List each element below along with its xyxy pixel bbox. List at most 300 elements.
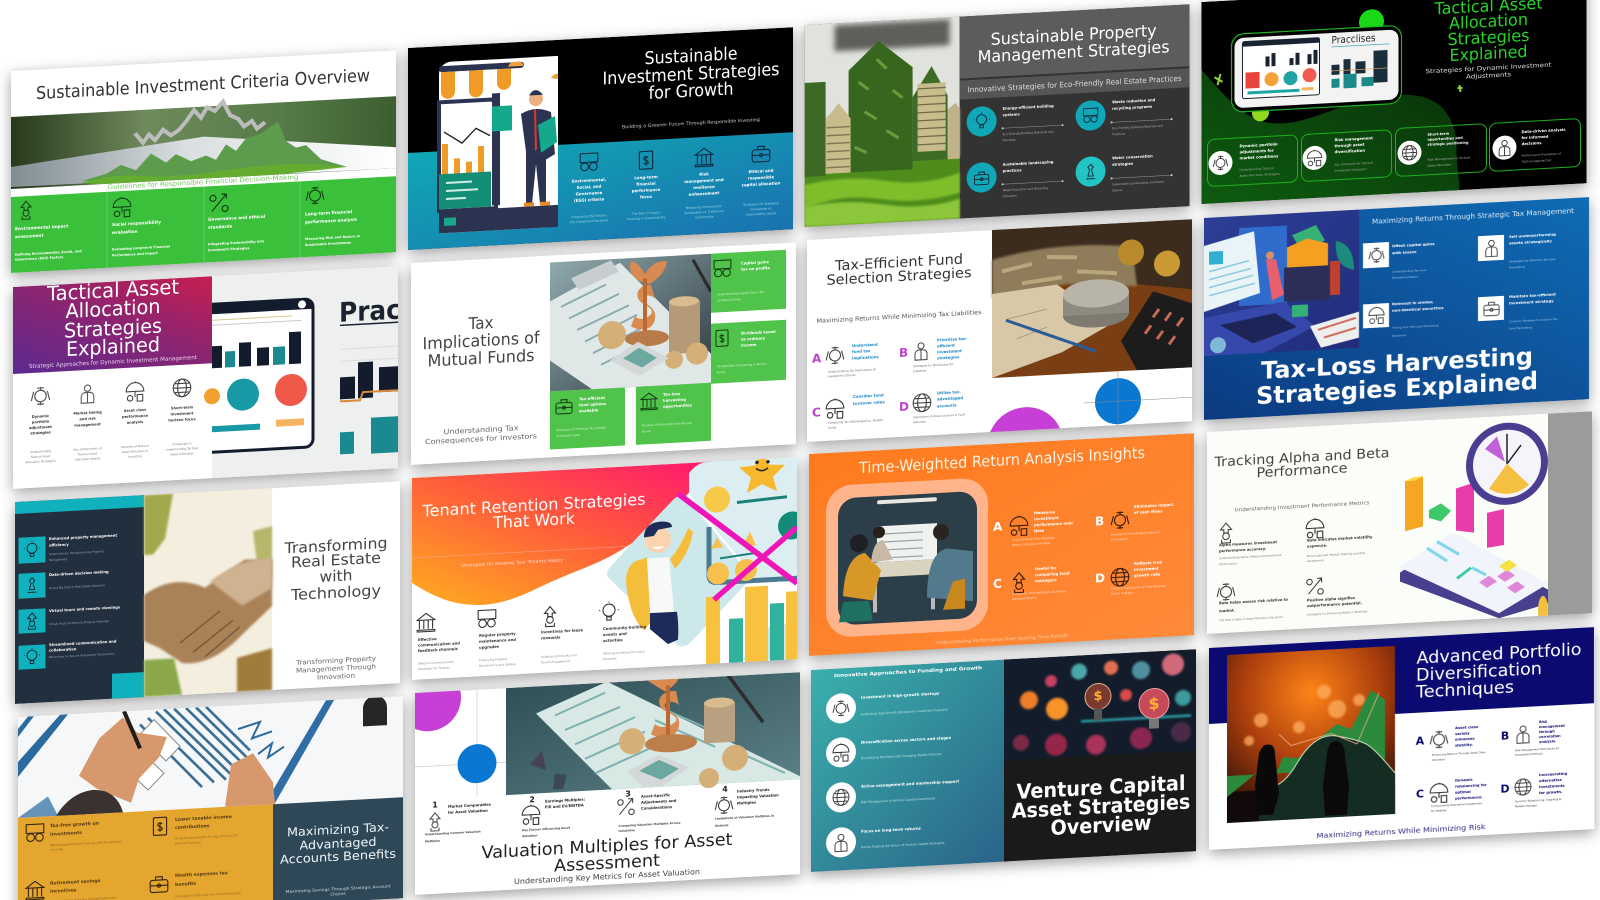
heading: Selection Strategies: [826, 265, 971, 289]
icon: [150, 876, 168, 893]
icon: [556, 399, 572, 414]
accent circles: [1252, 9, 1384, 122]
item: long-term focus: financial: [636, 181, 656, 187]
item: reinvest: [1363, 299, 1444, 339]
item: long-term performance: performance analysis: [305, 217, 358, 226]
item: risk management: management and: [684, 177, 724, 184]
item: health expenses: Health expenses tax: [175, 870, 228, 879]
heading: That Work: [492, 509, 576, 532]
item: long-term performance: Sustainable Investments: [305, 241, 351, 247]
callout: tax-efficient: on Mutual Funds: [556, 433, 580, 438]
heading: [280, 820, 396, 867]
item A: fund tax: [852, 348, 871, 354]
image: tax form with dollar statue: [506, 662, 800, 799]
icon: [1307, 578, 1323, 595]
subtitle strip: [960, 68, 1190, 100]
item: beta exposure: [1306, 515, 1373, 563]
item: alpha: Performance: [1219, 561, 1237, 566]
heading: [979, 25, 1169, 64]
item: communication: [417, 612, 460, 671]
card: dynamic portfolio: Dynamic portfolio: [1240, 141, 1278, 148]
item: lease incentives: Building Community and: [541, 653, 577, 659]
item: governance: Investment Strategies: [208, 246, 250, 252]
heading: Performance: [1256, 460, 1348, 481]
item: active management: Risk Management in Venture Capital Investments: [861, 796, 936, 804]
item: ethical capital: responsible: [748, 174, 774, 181]
item D: Practical Applications of Time-Weighted: [1111, 584, 1167, 591]
icon: [1111, 568, 1129, 586]
item: water conservation: Spaces: [1112, 188, 1123, 192]
icon: [1478, 296, 1504, 321]
item: long-term focus: focus: [640, 194, 653, 199]
icon: [1010, 515, 1028, 536]
callout: dividends: [711, 320, 786, 384]
item B: Risk Management Techniques for: [1515, 746, 1560, 752]
header band: [13, 276, 212, 374]
item B: through: [1539, 729, 1555, 734]
callout: tax-loss: harvesting: [663, 397, 686, 403]
item: risk management: [684, 147, 724, 220]
item: long-term focus: Investing in Sustainability: [627, 215, 666, 221]
item A: Return Calculation Methods: [1012, 541, 1051, 547]
item: sustainable landscaping: Sustainable landscaping: [1003, 160, 1054, 167]
item C: Funds: [828, 425, 837, 430]
item: alpha: Understanding Alpha: Measuring Investment: [1219, 553, 1282, 560]
item: positive alpha: [1307, 576, 1368, 617]
icon: [18, 572, 46, 599]
item: long-term returns: Focus on long-term returns: [861, 826, 922, 834]
item: beta risk: [1217, 580, 1288, 622]
card: risk management: Investment Decisions: [1334, 167, 1367, 173]
item D: Selection: [913, 420, 926, 424]
item: dynamic adjustment: Understanding: [30, 449, 51, 454]
item: lease incentives: Incentives for lease: [541, 627, 584, 635]
panel: Tenant Retention Strategies slide: [412, 449, 806, 680]
item 2: Valuation: [522, 833, 537, 838]
item: virtual tours: [18, 604, 121, 634]
subtitle: Strategies for Keeping Your Tenants Happy: [461, 557, 563, 569]
item: reinvest: Timing Your Tax-Loss Harvesting: [1391, 323, 1439, 330]
callout: tax-efficient: fund options: [579, 401, 607, 407]
item: sell underperforming: [1478, 231, 1556, 271]
dashboard card: [1232, 25, 1402, 112]
panel: Tactical Asset Allocation black slide: [1202, 0, 1586, 204]
heading: Management Strategies: [978, 37, 1170, 67]
item A: A: [812, 351, 822, 366]
item: virtual tours: Virtual Tours: Enhancing Property Viewings: [49, 619, 109, 626]
item: ethical capital: Strategies for Engaging: [743, 201, 779, 207]
item: dynamic adjustment: adjustment: [29, 425, 52, 430]
panel: Tax-Efficient Fund Selection slide: [807, 219, 1192, 495]
item: maintenance: maintenance and: [479, 637, 516, 644]
item: governance: [208, 192, 266, 252]
item 4: Impacting Valuation: [737, 793, 779, 800]
item: short-term: investment: [171, 411, 194, 416]
item: ESG criteria: [570, 152, 609, 224]
item D: Market Changes: [1515, 803, 1537, 808]
card: short-term: strategic positioning: [1428, 141, 1469, 147]
heading: Tenant Retention Strategies: [421, 490, 646, 521]
item 1: Market Comparables: [448, 803, 492, 809]
item D: Incorporating: [1539, 772, 1568, 777]
heading: [1256, 342, 1538, 410]
item D: growth rate: [1134, 572, 1160, 578]
icon: [714, 260, 731, 277]
illustration: person and app tiles: [607, 449, 806, 669]
icon: umbrella: [113, 197, 131, 217]
panel: Advanced Portfolio Diversification slide: [1209, 627, 1594, 850]
item: community: Offering Incentives for Lease: [603, 649, 645, 656]
heading: Transforming: [283, 534, 388, 557]
image: bokeh lightbulbs: $: [1148, 694, 1160, 713]
icon: [1517, 726, 1529, 743]
image: bokeh lightbulbs: $: [1093, 689, 1103, 704]
item: community: Renewals: [603, 656, 617, 661]
item: risk management: enhancement: [689, 190, 719, 197]
callout: capital gains: Capital gains: [741, 259, 770, 266]
item D: Reflects true: [1134, 559, 1163, 566]
icon: [81, 385, 94, 403]
item: dynamic adjustment: Tactical Asset: [30, 454, 51, 459]
item: social responsibility: Evaluating Long-term Financial: [112, 244, 170, 252]
icon: [618, 798, 634, 815]
callout: tax-efficient: [550, 387, 625, 449]
item B: strategies: [937, 354, 960, 360]
item: maintenance: Regular property: [479, 631, 516, 638]
heading: Sustainable Investment Criteria Overview: [36, 66, 370, 104]
item: dynamic adjustment: [26, 386, 56, 464]
heading: Accounts Benefits: [280, 847, 396, 867]
icon: [826, 827, 856, 858]
card: short-term: Short-term: [1428, 132, 1450, 137]
item: community: Community-building: [603, 624, 647, 631]
item: sell underperforming: Strategies for Effective Tax-Loss: [1509, 257, 1556, 264]
item: social responsibility: evaluation: [112, 229, 138, 236]
item 3: Industries: [618, 828, 635, 833]
icon: [915, 343, 927, 360]
icon: [913, 394, 931, 412]
item: environmental impact: assessment: [15, 233, 44, 240]
item A: Understanding Tax Implications of: [828, 367, 877, 374]
item: maintain strategy: [1478, 291, 1558, 332]
item: social responsibility: [112, 195, 170, 258]
item A: investment: [1034, 515, 1059, 521]
item A: Asset class: [1455, 725, 1479, 730]
item: beta risk: market.: [1219, 608, 1236, 613]
item: health expenses: benefits: [175, 881, 196, 888]
item: reinvest: Reinvest in similar,: [1392, 299, 1434, 306]
item: alpha: performance accuracy.: [1219, 547, 1267, 553]
heading: Assessment: [554, 851, 660, 876]
item C: Weighted Returns: [1012, 596, 1037, 601]
subtitle: Maximizing Returns Through Strategic Tax Management: [1372, 207, 1574, 226]
heading: Techniques: [1415, 678, 1514, 703]
image: hands writing on a form: [18, 691, 403, 818]
item: waste reduction: Practices: [1112, 132, 1126, 136]
item: ethical capital: Sustainability Issues: [746, 211, 777, 217]
icon: house growth: [21, 201, 31, 219]
item: environmental impact: Environmental impact: [15, 223, 68, 232]
item: asset class: performance: [122, 414, 148, 419]
card: risk management: Risk management: [1334, 135, 1373, 142]
heading: Allocation: [66, 294, 161, 323]
icon: lightbulb badge: [967, 106, 997, 137]
item: active management: Active management and mentorship support: [861, 778, 959, 789]
heading: Tax-Efficient Fund: [834, 252, 963, 275]
item: market timing: Market timing: [73, 410, 102, 416]
item: streamlined communication: Streamlined communication and: [49, 640, 117, 647]
item C: Comparing Tax Advantaged vs. Taxable: [828, 418, 883, 425]
left navy panel: [15, 495, 144, 704]
icon: percent arrow: [210, 194, 228, 212]
item 4: Multiples: [737, 801, 757, 806]
item: maintenance: Enhancing Property: [479, 657, 508, 662]
subtitle: Understanding Key Metrics for Asset Valuation: [514, 867, 700, 886]
item: lower taxable income: contributions: [175, 823, 210, 831]
item 1: Multiples: [425, 839, 440, 843]
item: property management: [18, 532, 117, 564]
subtitle: Transforming Property: [295, 655, 376, 667]
item: water conservation: Sustainable Landscaping and Green: [1112, 180, 1164, 186]
heading: [1415, 640, 1582, 703]
heading: Strategies Explained: [1256, 367, 1538, 410]
item: sell underperforming: Sell underperforming: [1509, 231, 1556, 239]
item 4: Analysis: [715, 823, 729, 828]
item: offset gains: [1363, 240, 1435, 281]
icon: briefcase: [752, 146, 770, 162]
item: market timing: and risk: [79, 416, 96, 421]
item 3: [618, 787, 681, 833]
subtitle: Strategic Approaches for Dynamic Investment Management: [29, 355, 198, 370]
item D: [1095, 559, 1167, 597]
card: dynamic portfolio: market conditions: [1240, 153, 1279, 160]
item: diversification: [826, 731, 952, 768]
callout: dividends: income: [741, 342, 757, 348]
icon: [826, 782, 856, 813]
item: water conservation: [1076, 154, 1173, 192]
heading: Time-Weighted Return Analysis Insights: [858, 444, 1145, 477]
item: tax-free growth: Accounts: [50, 847, 64, 852]
item: dynamic adjustment: strategies: [30, 430, 51, 436]
icon: [18, 644, 46, 670]
item: active management: [826, 776, 959, 813]
icon: [126, 381, 144, 402]
icon: [715, 796, 733, 815]
icon: [641, 393, 657, 410]
item: asset class: Asset Allocation in: [122, 449, 148, 454]
item A: [1416, 725, 1486, 763]
item: environmental impact: Defining Environmental, Social, and: [15, 249, 82, 257]
panel: Maximizing Tax-Advantaged Accounts slide: [18, 691, 403, 900]
item C: comparing fund: [1035, 570, 1070, 577]
heading: Tax: [468, 313, 494, 333]
item 2: P/E and EV/EBITDA: [545, 803, 584, 809]
item B: [1095, 502, 1173, 543]
item C: [1416, 777, 1487, 814]
item D: D: [1500, 782, 1510, 796]
item A: performance over: [1034, 520, 1073, 527]
image: meeting room in rounded frame: [826, 477, 988, 638]
item: beta risk: The Role of Beta in Asset Allocation Decisions: [1218, 615, 1283, 622]
item A: [812, 342, 879, 379]
item 3: 3: [625, 789, 631, 799]
item: ESG criteria: Governance: [576, 190, 603, 196]
item: short-term: Challenges in: [172, 441, 192, 446]
image: green market chart on table: [11, 92, 396, 189]
heading: [826, 251, 972, 289]
subtitle: Management Through: [296, 663, 376, 675]
subtitle: Innovative Approaches to Funding and Growth: [834, 665, 983, 679]
item D: Importance of Asset Location in Fund: [913, 412, 965, 419]
item C: Useful for: [1035, 565, 1057, 571]
heading: Allocation: [1449, 10, 1528, 33]
item C: C: [812, 405, 821, 420]
item: property management: Enhanced property management: [49, 533, 117, 541]
card: risk management: diversification: [1334, 148, 1365, 154]
item: offset gains: Offset capital gains: [1392, 241, 1435, 248]
item D: accounts: [937, 402, 957, 408]
item: offset gains: Harvesting Basics: [1392, 274, 1418, 280]
item B: B: [899, 346, 908, 360]
item: beta exposure: Beta Explained: Market Volatility and Risk: [1307, 551, 1366, 558]
item: community: activities: [603, 637, 623, 643]
item: data-driven: [18, 569, 109, 599]
icon: chess badge: [1076, 156, 1106, 187]
item 1: [425, 797, 492, 843]
item D: D: [1095, 571, 1105, 586]
item: asset class: Investing: [128, 454, 142, 459]
item: sustainable landscaping: Waste Reduction and Recycling: [1003, 186, 1048, 192]
item B: management: [1539, 724, 1565, 729]
card: risk management: through asset: [1334, 142, 1365, 148]
item 2: Key Factors Influencing Asset: [522, 826, 571, 832]
title block: [960, 4, 1190, 79]
item: energy-efficient: Eco-Friendly Building Materials and: [1003, 130, 1054, 136]
item D: D: [899, 399, 909, 414]
icon: document dollar: [639, 151, 653, 169]
item: social responsibility: Social responsibility: [112, 219, 161, 228]
icon: [826, 737, 856, 768]
heading: [1012, 771, 1190, 842]
icon: [1363, 303, 1389, 328]
heading: Strategies: [64, 313, 162, 343]
item: retirement savings: [26, 877, 117, 900]
heading: [1434, 0, 1543, 66]
item C: turnover rates: [853, 399, 885, 406]
item: short-term: Implementing Tactical: [166, 446, 198, 452]
icon: [18, 536, 46, 564]
item: health expenses: Strategies for Effective Use of Health Savings: [175, 891, 241, 899]
subtitle: Understanding Tax: [444, 424, 518, 436]
item A: time: [1034, 528, 1044, 533]
item: communication: Effective Communication: [418, 660, 454, 666]
item: energy-efficient: [966, 104, 1064, 142]
item: diversification: Diversification across sectors and stages: [861, 735, 952, 745]
item: governance: Governance and ethical: [208, 214, 266, 223]
item 3: Considerations: [641, 805, 673, 811]
icon: [153, 817, 167, 835]
item C: C: [1416, 787, 1424, 801]
item: beta exposure: Assessment: [1307, 558, 1325, 563]
item: risk management: Risk: [699, 171, 709, 177]
item: environmental impact: Governance (ESG) Factors: [15, 255, 63, 262]
title panel: [273, 797, 403, 900]
item 2: 2: [529, 795, 535, 804]
item 2: [522, 792, 586, 838]
item D: for growth.: [1539, 790, 1563, 795]
image: coins and calculator on wood: [992, 219, 1192, 378]
item: short-term: horizon focus: [168, 417, 196, 423]
icon: [1515, 779, 1531, 795]
item B: analysis.: [1539, 739, 1556, 744]
item: dynamic adjustment: Dynamic: [32, 414, 49, 419]
item: governance: standards: [208, 224, 233, 231]
item: ESG criteria: into Investment Decisions: [570, 218, 609, 224]
item: lower taxable income: Medical Expenses: [175, 840, 201, 846]
image: silhouettes and glowing chart: [1227, 646, 1395, 823]
item 1: 1: [432, 800, 438, 810]
panel: Transforming Real Estate slide: [15, 481, 400, 704]
heading: [482, 830, 733, 880]
subtitle: Strategies for Dynamic Investment: [1425, 62, 1552, 75]
item 1: for Asset Valuation: [448, 809, 488, 815]
subtitle: [286, 883, 391, 899]
item: lower taxable income: Lower taxable income: [175, 814, 232, 823]
item C: C: [993, 577, 1002, 591]
subtitle: Maximizing Savings Through Strategic Account: [286, 883, 391, 894]
item 1: Understanding Common Valuation: [425, 829, 481, 836]
item: asset class: [121, 381, 149, 459]
icon: [1306, 518, 1324, 539]
item B: investment: [937, 348, 962, 354]
icon: [31, 386, 50, 406]
item: data-driven: Data-driven decision making: [49, 570, 109, 577]
item D: Utilize tax-: [937, 389, 961, 395]
card: dynamic portfolio: [1208, 135, 1298, 187]
heading: Explained: [66, 332, 160, 361]
item B: Benefits of Time-Weighted Returns: [1111, 530, 1160, 537]
item: long-term performance: Measuring Risk and Return in: [305, 234, 361, 241]
icon: cash: [580, 153, 598, 171]
item C: managers: [1035, 577, 1057, 583]
subtitle: [1426, 62, 1552, 83]
icon: [826, 346, 844, 365]
item: maintenance: Maintenance and Upkeep: [479, 662, 516, 668]
item: long-term performance: [305, 184, 361, 247]
heading: [421, 490, 646, 536]
card: dynamic portfolio: adjustments for: [1240, 148, 1274, 154]
heading: Investment Strategies: [603, 60, 780, 89]
subtitle: Maximizing Returns While Minimizing Tax Liabilities: [816, 309, 981, 325]
icon: recycling badge: [1076, 100, 1106, 131]
item: market timing: Allocation Models: [75, 456, 101, 462]
heading: Overview: [1050, 811, 1152, 840]
subtitle: [425, 423, 537, 446]
icon: [1363, 242, 1389, 268]
item: maintenance: [478, 609, 516, 668]
item: tax-free growth: Maximizing Retirement Savings with Tax-Deferred: [50, 839, 122, 847]
callout: tax-loss: opportunities: [663, 402, 693, 409]
item: data-driven: AI and Big Data in Real Estate Decisions: [49, 583, 106, 590]
subtitle: Building a Greener Future Through Responsible Investing: [622, 117, 760, 130]
item: beta exposure: exposure.: [1307, 543, 1328, 549]
item: tax-free growth: [26, 819, 122, 853]
item B: [899, 336, 967, 374]
heading: [1213, 445, 1390, 484]
heading: Valuation Multiples for Asset: [482, 830, 733, 863]
item B: [1501, 719, 1565, 758]
item: tax-free growth: investments: [50, 830, 82, 838]
